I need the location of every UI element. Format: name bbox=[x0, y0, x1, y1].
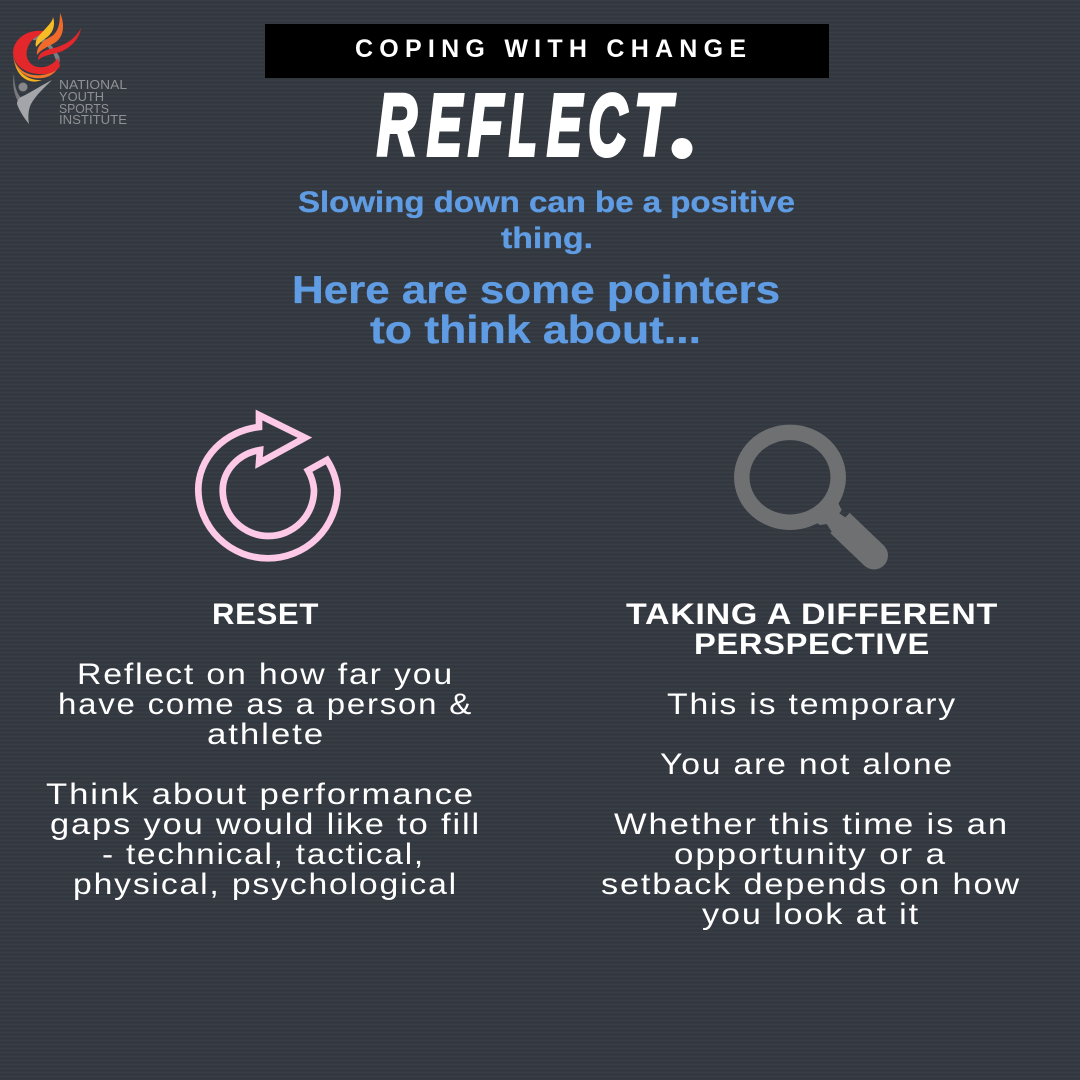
text block: performance gaps: Think about performance bbox=[46, 778, 475, 811]
text block: opportunity or setback: Whether this time is an bbox=[614, 808, 1009, 841]
heading: perspective bbox=[626, 598, 998, 661]
text block: opportunity or setback: you look at it bbox=[702, 898, 920, 931]
heading: perspective: PERSPECTIVE bbox=[694, 628, 930, 661]
heading: Reflect: R bbox=[377, 77, 417, 174]
heading: reset: RESET bbox=[212, 598, 319, 631]
heading: Reflect: . bbox=[676, 121, 687, 165]
logo wordmark: SPORTS bbox=[59, 102, 109, 116]
text block: opportunity or setback: setback depends on how bbox=[601, 868, 1021, 901]
text block: reflect: athlete bbox=[207, 718, 325, 751]
icon: magnifying glass bbox=[742, 432, 888, 570]
heading: perspective: TAKING A DIFFERENT bbox=[626, 598, 998, 631]
subheading: Slowing down can be a positive bbox=[298, 186, 795, 219]
intro text: to think about... bbox=[370, 309, 701, 352]
text block: performance gaps: physical, psychological bbox=[73, 868, 458, 901]
text block: performance gaps: - technical, tactical, bbox=[102, 838, 425, 871]
intro text: Here are some pointers bbox=[292, 269, 780, 312]
logo wordmark: YOUTH bbox=[59, 90, 104, 104]
heading: Reflect: E bbox=[547, 77, 584, 174]
heading: Reflect: T bbox=[634, 77, 676, 174]
heading: Reflect: E bbox=[427, 77, 464, 174]
heading: Reflect bbox=[377, 77, 692, 174]
subheading bbox=[298, 186, 795, 255]
heading: Reflect: F bbox=[468, 77, 505, 174]
subheading: thing. bbox=[501, 222, 593, 255]
logo: National Youth Sports Institute bbox=[13, 13, 127, 127]
text block: performance gaps bbox=[46, 778, 481, 901]
logo wordmark bbox=[59, 78, 127, 127]
text: not alone: You are not alone bbox=[660, 748, 954, 781]
panel: taking a different perspective bbox=[601, 598, 1021, 931]
panel: reset bbox=[46, 598, 481, 901]
logo wordmark: INSTITUTE bbox=[59, 113, 127, 127]
text block: opportunity or setback: opportunity or a bbox=[674, 838, 947, 871]
title banner bbox=[265, 24, 829, 78]
text block: reflect bbox=[58, 658, 473, 751]
title banner: COPING WITH CHANGE bbox=[355, 35, 746, 63]
text block: reflect: have come as a person & bbox=[58, 688, 473, 721]
logo wordmark: NATIONAL bbox=[59, 78, 127, 92]
intro text bbox=[292, 269, 780, 352]
text block: opportunity or setback bbox=[601, 808, 1021, 931]
text block: performance gaps: gaps you would like to fill bbox=[50, 808, 481, 841]
text: temporary: This is temporary bbox=[667, 688, 957, 721]
heading: Reflect: L bbox=[509, 77, 537, 174]
icon: reset arrow bbox=[198, 415, 338, 558]
heading: Reflect: C bbox=[588, 77, 628, 174]
text block: reflect: Reflect on how far you bbox=[77, 658, 454, 691]
